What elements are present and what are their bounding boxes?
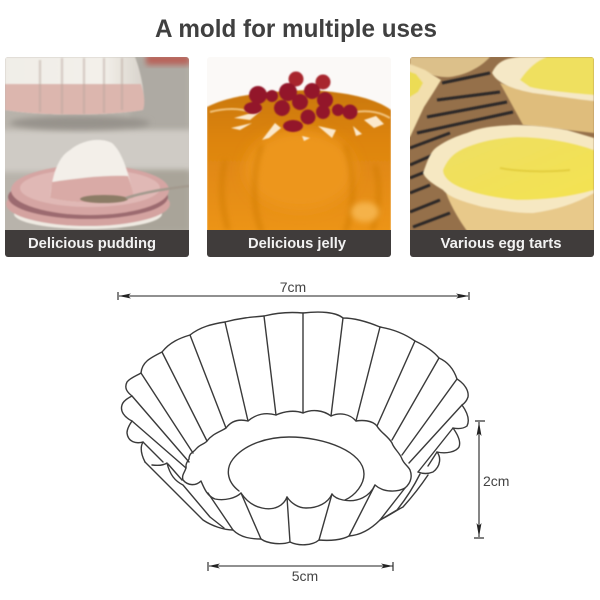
sliced pudding — [50, 140, 134, 202]
caption: jelly: Delicious jelly — [248, 236, 346, 252]
panel: delicious pudding — [0, 54, 194, 257]
label: 2cm: 2cm — [483, 473, 509, 489]
label: 7cm: 7cm — [280, 279, 306, 295]
tart top left — [410, 63, 442, 138]
label: 5cm: 5cm — [292, 568, 318, 584]
lower ribs and wall — [208, 485, 405, 542]
pomegranate seeds — [244, 72, 358, 132]
caption: egg tarts: Various egg tarts — [440, 236, 562, 252]
photo background: cooling rack — [410, 57, 594, 232]
outer rim — [121, 312, 468, 474]
inner fluted rim — [183, 411, 411, 509]
pink plates — [6, 165, 170, 229]
tart front — [423, 125, 594, 235]
tart top centre — [410, 57, 490, 77]
caption: pudding: Delicious pudding — [28, 236, 156, 252]
inner base oval — [228, 437, 364, 500]
panel: various egg tarts — [405, 57, 594, 257]
title: A mold for multiple uses — [155, 15, 437, 43]
tart top right — [492, 57, 594, 133]
caption bar: jelly — [207, 230, 391, 257]
spoon — [80, 186, 189, 203]
photo background: pudding — [0, 54, 194, 232]
panel: delicious jelly — [207, 57, 391, 257]
caption bar: egg tarts — [410, 230, 594, 257]
tart mold line drawing — [121, 312, 468, 545]
dimension: 7cm width — [118, 279, 469, 300]
dimension: 2cm height — [474, 421, 509, 538]
dimension: 5cm width — [208, 562, 393, 584]
ribs top — [132, 313, 303, 480]
ribbed mold dessert — [5, 57, 144, 114]
orange jelly dome — [207, 90, 391, 232]
caption bar: pudding — [5, 230, 189, 257]
photo background: white — [207, 57, 391, 232]
